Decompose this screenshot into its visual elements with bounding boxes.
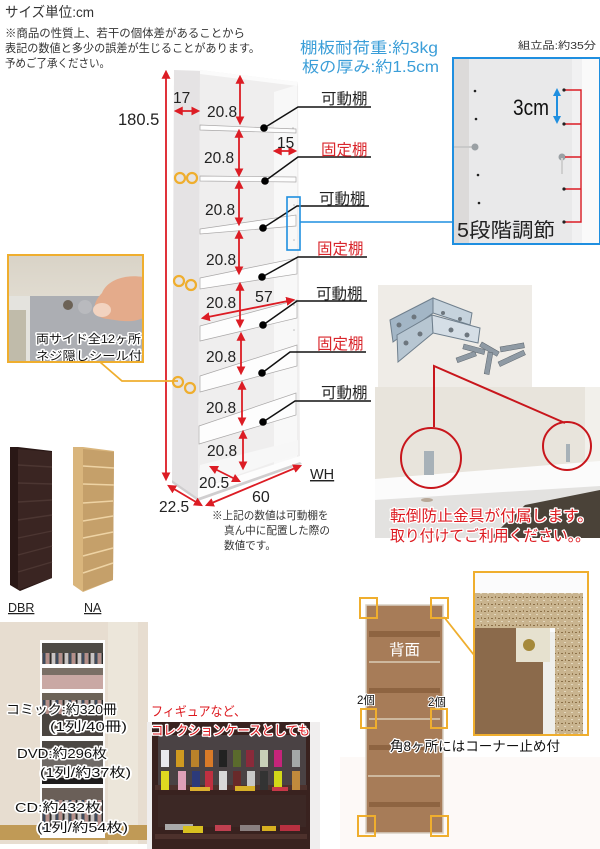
shelf label: adjustable 3: 可動棚 [316, 285, 363, 303]
adjustment holes [292, 127, 295, 331]
shelf label: adjustable 4 [259, 384, 371, 426]
installed bracket right [566, 444, 570, 462]
base depth dimension 20.5 [199, 467, 239, 492]
shelf boards [199, 125, 297, 444]
capacity labels: (1列/40冊) [50, 719, 127, 734]
shelf label: adjustable 1: 可動棚 [321, 90, 368, 108]
shelf label: fixed 1: 固定棚 [321, 141, 368, 159]
shelf pins [453, 144, 566, 174]
side depth dimension 17: 17 [173, 90, 190, 107]
capacity labels: (1列/約37枚) [40, 765, 131, 780]
capacity info thickness: 板の厚み:約1.5cm [302, 58, 439, 76]
shelf-height dimensions 20.8 [204, 77, 243, 468]
note: measured values: 数値です。 [224, 539, 276, 552]
inner width dimension 57 [203, 289, 293, 318]
shelf-height dimensions 20.8: 20.8 [206, 295, 236, 312]
anti-tip caption: 取り付けてご利用ください。。 [390, 527, 590, 545]
note: individual differences: 表記の数値と多少の誤差が生じることがあります。 [5, 41, 260, 55]
note: measured values [212, 509, 330, 552]
inner width dimension 57: 57 [255, 289, 273, 306]
note: individual differences [5, 26, 260, 70]
figure caption: コレクションケースとしても [151, 723, 310, 738]
capacity info top: 棚板耐荷重:約3kg [300, 39, 438, 57]
shelf label: fixed 2: 固定棚 [317, 240, 364, 258]
back panel of shelf [357, 598, 448, 836]
base depth dimension 20.5: 20.5 [199, 475, 229, 492]
shelf label: adjustable 2 [259, 190, 369, 232]
photo: figure collection case [147, 722, 320, 849]
figure caption: フィギュアなど、 [151, 704, 246, 719]
outer width dimension 60 [207, 466, 300, 506]
sticker caption: ネジ隠しシール付 [36, 349, 142, 363]
shelf label: adjustable 2: 可動棚 [319, 190, 366, 208]
sticker caption: 両サイド全12ヶ所 [36, 332, 141, 346]
shelf illustration [172, 70, 302, 501]
photo: shelf top with brackets installed [375, 387, 600, 538]
panel: adjustable pin holes photo [453, 58, 600, 244]
connector to corner detail [444, 617, 502, 655]
outer depth dimension 22.5: 22.5 [159, 499, 189, 516]
red callout lines and circles [401, 366, 591, 488]
assembly time: 組立品:約35分 [518, 39, 596, 52]
photo: metal brackets and screws [378, 285, 532, 387]
side depth dimension 15: 15 [277, 135, 294, 152]
capacity labels: (1列/約54枚) [37, 820, 128, 835]
five step adjust label: 5段階調節 [457, 219, 555, 242]
note: individual differences: ※商品の性質上、若干の個体差があることから [5, 26, 245, 40]
unit heading: サイズ単位:cm [5, 4, 94, 20]
photo: bookcase filled with media [0, 622, 148, 844]
shelf label: fixed 3 [258, 335, 366, 377]
anti-tip caption: 転倒防止金具が付属します。 [390, 507, 593, 525]
capacity labels: コミック:約320冊 [6, 702, 117, 717]
shelf label: fixed 2 [258, 240, 367, 281]
note: measured values: 真ん中に配置した際の [224, 524, 330, 537]
shelf label: fixed 1 [261, 141, 371, 185]
sticker caption [36, 332, 142, 363]
shelf-height dimensions 20.8: 20.8 [206, 349, 236, 366]
screw rings [173, 173, 197, 393]
anti-tip caption [390, 507, 593, 545]
figures [161, 750, 300, 833]
3cm label: 3cm [513, 95, 549, 120]
NA label: NA [84, 601, 102, 615]
panel: corner fitting detail photo [474, 572, 588, 735]
figure caption [151, 704, 310, 738]
left pin holes [474, 90, 480, 204]
side depth dimension 17 [173, 90, 198, 111]
3cm arrow [556, 90, 558, 122]
total height dimension: 180.5 [118, 111, 159, 129]
shelf label: adjustable 1 [260, 90, 371, 132]
back panel of shelf: 2個 [428, 696, 446, 709]
capacity labels: CD:約432枚 [15, 800, 101, 815]
colour sample: DBR [8, 447, 52, 615]
colour sample: NA [73, 447, 114, 615]
panel: screw cover sticker photo [8, 255, 143, 363]
shelf-height dimensions 20.8: 20.8 [206, 252, 236, 269]
back label: 背面 [389, 641, 420, 659]
shelf-height dimensions 20.8: 20.8 [206, 400, 236, 417]
note: individual differences: 予めご了承ください。 [5, 56, 110, 70]
colour label WH: WH [310, 467, 334, 483]
capacity labels [6, 702, 131, 835]
shelf-height dimensions 20.8: 20.8 [207, 104, 237, 121]
shelf-height dimensions 20.8: 20.8 [205, 202, 235, 219]
shelf-height dimensions 20.8: 20.8 [204, 150, 234, 167]
count labels: 2個 [357, 694, 375, 707]
corner stop caption: 角8ヶ所にはコーナー止め付 [390, 739, 560, 754]
installed bracket left [424, 451, 434, 475]
shelf label: adjustable 4: 可動棚 [321, 384, 368, 402]
corner markers [358, 598, 448, 836]
DBR label: DBR [8, 601, 34, 615]
blue highlight and connector [287, 197, 453, 250]
faint lower background [340, 757, 600, 849]
shelf label: adjustable 3 [259, 285, 367, 329]
outer width dimension 60: 60 [252, 489, 270, 506]
connector to sticker photo [100, 362, 178, 381]
capacity labels: DVD:約296枚 [17, 746, 107, 761]
red bracket marks [565, 90, 581, 222]
outer depth dimension 22.5 [159, 486, 201, 516]
shelf-height dimensions 20.8: 20.8 [207, 443, 237, 460]
note: measured values: ※上記の数値は可動棚を [212, 509, 329, 522]
shelf label: fixed 3: 固定棚 [317, 335, 364, 353]
